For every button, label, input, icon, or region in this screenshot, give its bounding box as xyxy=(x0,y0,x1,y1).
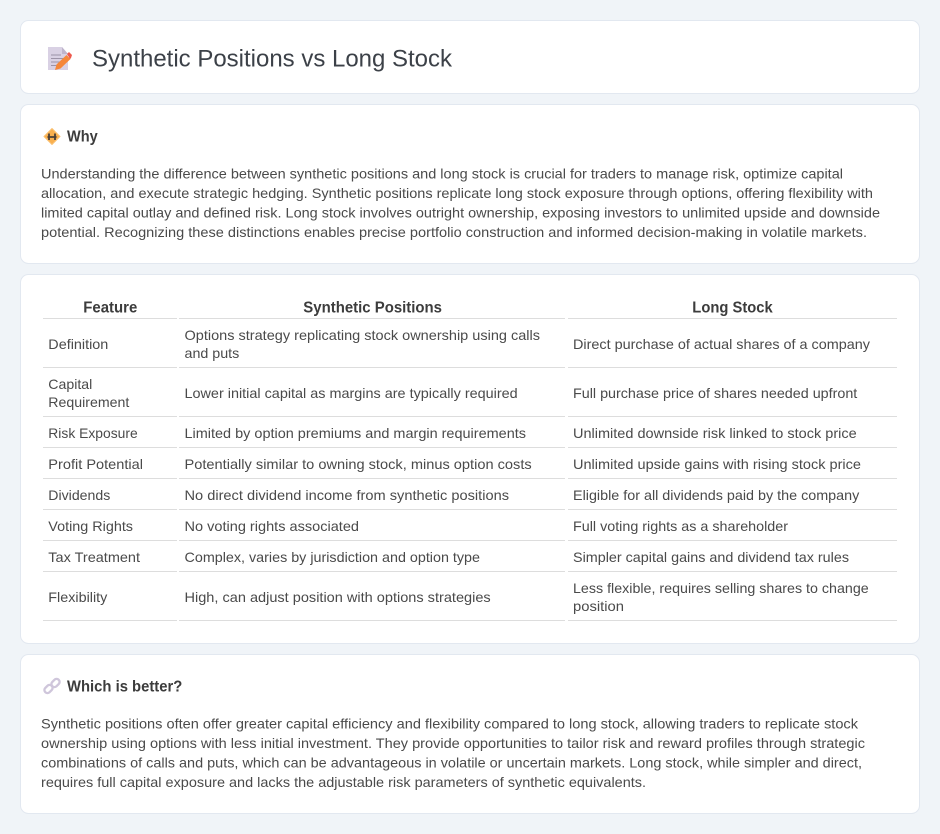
text block: why paragraph: potential. Recognizing these distinctions enables precise portfolio construction and informed decision-making in volatile markets. xyxy=(41,224,867,240)
table row: tax treatment: Simpler capital gains and dividend tax rules xyxy=(573,549,849,565)
table row: tax treatment: Complex, varies by jurisdiction and option type xyxy=(184,549,480,565)
table row: tax treatment: Tax Treatment xyxy=(48,549,140,565)
table row: risk exposure: Unlimited downside risk linked to stock price xyxy=(573,425,857,441)
table row: definition: and puts xyxy=(184,345,239,361)
table row: flexibility: Less flexible, requires selling shares to change xyxy=(573,580,869,596)
table row: flexibility: Flexibility xyxy=(48,589,107,605)
text block: why paragraph: limited capital outlay and defined risk. Long stock involves outright ownership, exposing investors to unlimited upside and downside xyxy=(41,205,880,221)
table row: definition: Direct purchase of actual shares of a company xyxy=(573,336,870,352)
table row: dividends: Eligible for all dividends paid by the company xyxy=(573,487,859,503)
table header row: Synthetic Positions xyxy=(303,300,442,316)
table row: capital requirement: Capital xyxy=(48,376,92,392)
table row: risk exposure xyxy=(43,425,897,448)
icon: memo with pencil xyxy=(48,47,72,70)
table row: definition: Definition xyxy=(48,336,108,352)
table row: voting rights xyxy=(43,518,897,541)
icon: chain link xyxy=(43,678,61,694)
table row: profit potential: Potentially similar to owning stock, minus option costs xyxy=(184,456,532,472)
text block: why paragraph: allocation, and execute strategic hedging. Synthetic positions replicate long stock exposure through options, offering flexibility with xyxy=(41,185,873,201)
table row: dividends: No direct dividend income from synthetic positions xyxy=(184,487,509,503)
panel: comparison table xyxy=(20,274,920,644)
text block: which is better paragraph: combinations of calls and puts, which can be advantageous in volatile or uncertain markets. Long stock, while simpler and direct, xyxy=(41,755,862,771)
icon: orange diamond sign xyxy=(44,128,60,144)
table header row: Long Stock xyxy=(692,300,773,316)
table row: capital requirement xyxy=(43,376,897,417)
table row: tax treatment xyxy=(43,549,897,572)
text block: which is better paragraph xyxy=(41,715,865,790)
table row: definition xyxy=(43,327,897,368)
table row: capital requirement: Full purchase price of shares needed upfront xyxy=(573,385,857,401)
text block: why paragraph: Understanding the difference between synthetic positions and long stock is crucial for traders to manage risk, optimize capital xyxy=(41,165,843,181)
table header row xyxy=(43,300,897,319)
table row: profit potential xyxy=(43,456,897,479)
panel: why xyxy=(20,104,920,264)
table row: profit potential: Unlimited upside gains with rising stock price xyxy=(573,456,861,472)
table row: risk exposure: Limited by option premiums and margin requirements xyxy=(184,425,526,441)
table row: profit potential: Profit Potential xyxy=(48,456,143,472)
table row: flexibility xyxy=(43,580,897,621)
text block: why paragraph xyxy=(41,165,880,240)
title: Synthetic Positions vs Long Stock xyxy=(92,46,453,72)
text block: which is better paragraph: ownership using options with less initial investment. They provide opportunities to tailor risk and reward profiles through strategic xyxy=(41,735,865,751)
table row: capital requirement: Lower initial capital as margins are typically required xyxy=(184,385,518,401)
table header row: Feature xyxy=(83,300,137,316)
heading: why: Why xyxy=(67,128,98,146)
table row: dividends: Dividends xyxy=(48,487,110,503)
text block: which is better paragraph: Synthetic positions often offer greater capital efficiency and flexibility compared to long stock, allowing traders to replicate stock xyxy=(41,715,859,731)
table row: capital requirement: Requirement xyxy=(48,394,129,410)
table row: flexibility: High, can adjust position with options strategies xyxy=(184,589,491,605)
table row: definition: Options strategy replicating stock ownership using calls xyxy=(184,327,540,343)
table row: risk exposure: Risk Exposure xyxy=(48,425,138,441)
heading: which is better: Which is better? xyxy=(67,678,182,696)
table row: voting rights: No voting rights associated xyxy=(184,518,359,534)
table row: flexibility: position xyxy=(573,598,624,614)
text block: which is better paragraph: requires full capital exposure and lacks the adjustable risk parameters of synthetic equivalents. xyxy=(41,774,646,790)
panel: title header xyxy=(20,20,920,94)
table row: dividends xyxy=(43,487,897,510)
table row: voting rights: Voting Rights xyxy=(48,518,133,534)
panel: which is better xyxy=(20,654,920,814)
table row: voting rights: Full voting rights as a shareholder xyxy=(573,518,788,534)
